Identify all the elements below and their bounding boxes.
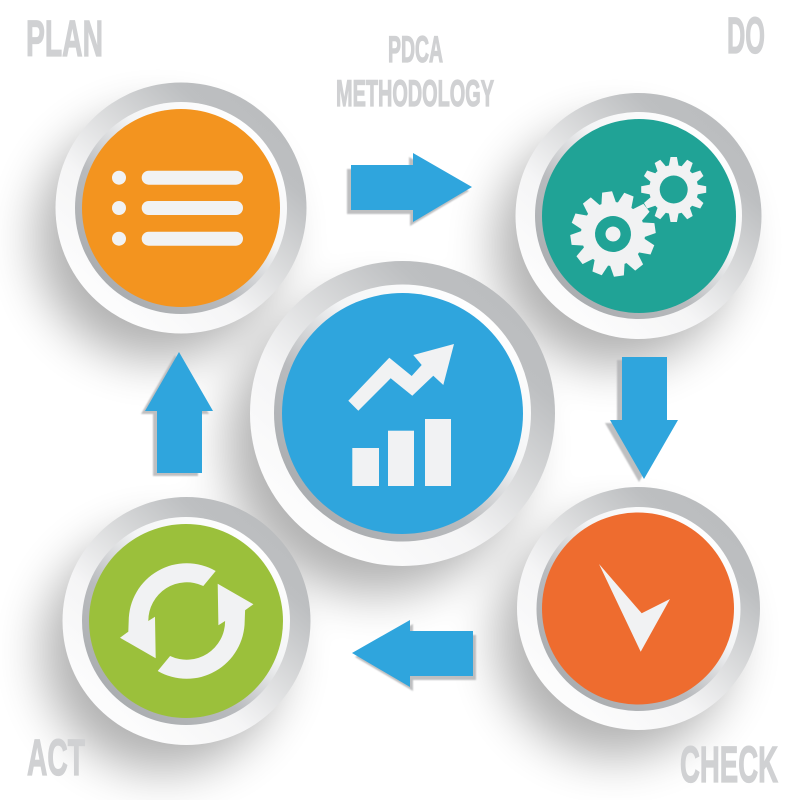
title	[336, 29, 494, 114]
icon: refresh arrows	[120, 563, 253, 679]
arrow: plan to do	[347, 153, 472, 226]
icon: growth chart	[348, 344, 454, 486]
label: act: ACT	[27, 729, 85, 786]
panel: plan	[56, 82, 306, 334]
icon: list	[112, 171, 243, 246]
panel: center chart	[250, 261, 555, 566]
arrow: do to check	[605, 357, 678, 482]
icon: gears	[565, 157, 706, 282]
panel: do	[516, 93, 762, 339]
panel: act	[62, 497, 310, 745]
panel: check	[517, 487, 760, 730]
arrow: act to plan	[141, 352, 213, 476]
label: plan: PLAN	[26, 10, 103, 67]
drop shadows	[36, 116, 735, 771]
title: METHODOLOGY	[336, 73, 494, 114]
arrow: check to act	[352, 620, 476, 691]
icon: check mark	[599, 564, 670, 652]
title: PDCA	[388, 29, 443, 70]
